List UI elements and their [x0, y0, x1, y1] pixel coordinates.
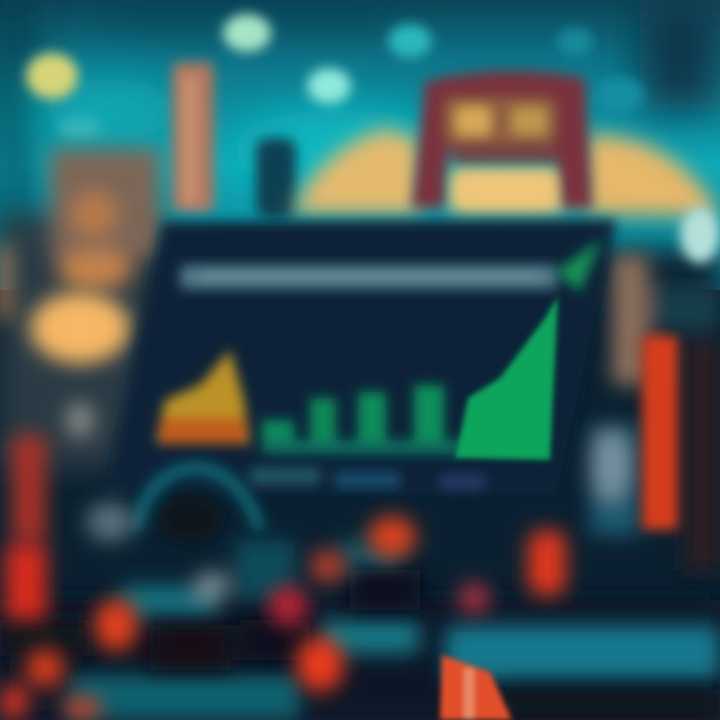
city: yellow domes	[292, 128, 715, 216]
background sky	[0, 0, 720, 300]
screen heading	[180, 265, 558, 289]
right side machinery	[590, 255, 720, 570]
sky lights	[26, 14, 644, 140]
red bar at right	[642, 335, 678, 530]
chart: axis labels	[250, 468, 485, 489]
laptop screen panel	[104, 220, 616, 494]
foreground: red markers	[0, 435, 566, 720]
foreground: dark objects	[0, 570, 720, 720]
city: red gate building	[412, 71, 592, 208]
city: chimney	[172, 62, 296, 218]
foreground: teal desk shapes	[66, 402, 720, 720]
city: left factory	[0, 148, 160, 320]
chart: yellow bars	[156, 350, 250, 444]
pale light at right edge	[680, 207, 720, 263]
foreground: teal arc gauge	[135, 468, 260, 542]
chart: green bars	[262, 238, 602, 460]
city: glowing furnace	[30, 292, 130, 364]
lower background	[0, 215, 720, 720]
foreground: orange block bottom	[440, 655, 512, 720]
